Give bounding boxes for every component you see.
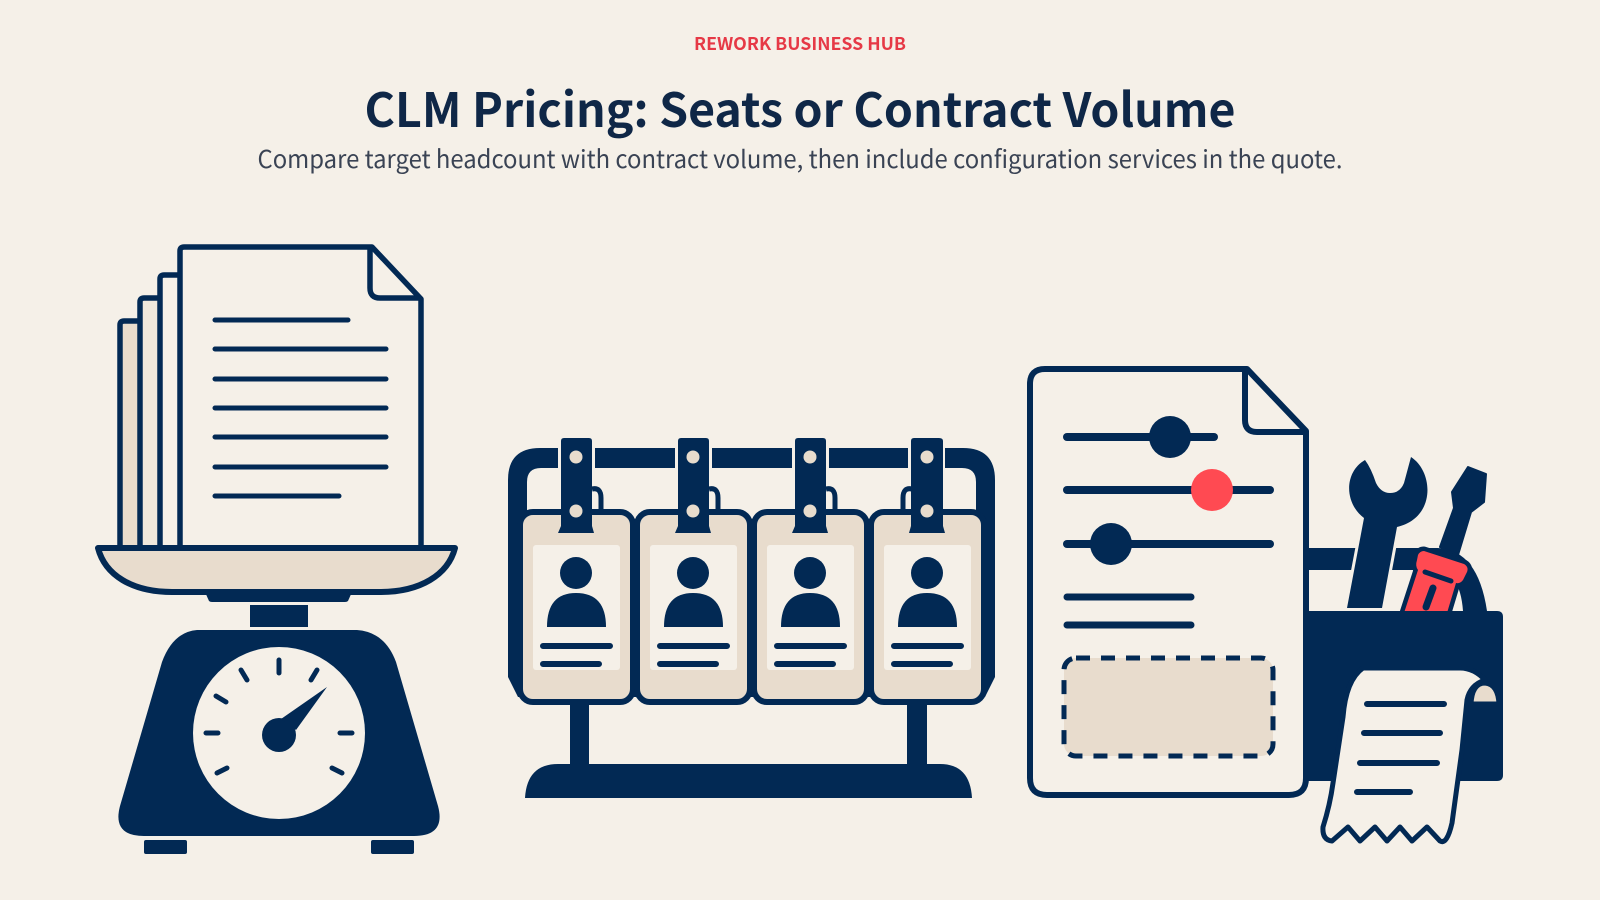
illustration: configuration document with sliders xyxy=(1030,369,1306,795)
illustration: tools and receipt behind configuration document xyxy=(1300,457,1503,842)
icon: scale base xyxy=(118,630,440,836)
illustration: scale weighing a stack of contracts xyxy=(98,247,455,854)
header xyxy=(258,31,1342,176)
subtitle: Compare target headcount with contract volume, then include configuration services in the quote. xyxy=(258,141,1342,176)
icon: scale pan xyxy=(98,548,455,602)
rack frame xyxy=(508,448,995,697)
rack stand xyxy=(525,700,972,798)
scale stem xyxy=(250,605,308,627)
badge 2 xyxy=(637,438,750,702)
icon: screwdriver xyxy=(1404,467,1486,613)
badge 1 xyxy=(520,438,633,702)
illustration: seat badges on a rack xyxy=(508,438,995,798)
title: CLM Pricing: Seats or Contract Volume xyxy=(364,72,1236,141)
dashed services box xyxy=(1064,658,1273,756)
icon: scale dial xyxy=(193,647,365,819)
badge 4 xyxy=(871,438,984,702)
toolbox handle xyxy=(1300,548,1487,611)
kicker: REWORK BUSINESS HUB xyxy=(694,31,906,56)
receipt curl xyxy=(1471,683,1499,704)
slider 2, highlighted xyxy=(1067,469,1270,511)
receipt lines xyxy=(1357,704,1444,792)
document sheet xyxy=(1030,369,1306,795)
icon: receipt xyxy=(1323,668,1499,842)
slider 3 xyxy=(1067,523,1270,565)
badge 3 xyxy=(754,438,867,702)
icon: wrench xyxy=(1347,457,1427,608)
document text lines xyxy=(1067,597,1191,625)
slider 1 xyxy=(1067,416,1214,458)
icon: toolbox xyxy=(1300,611,1503,781)
scale feet xyxy=(144,840,414,854)
icon: stacked contract pages xyxy=(120,247,421,548)
contract text lines xyxy=(215,320,386,496)
